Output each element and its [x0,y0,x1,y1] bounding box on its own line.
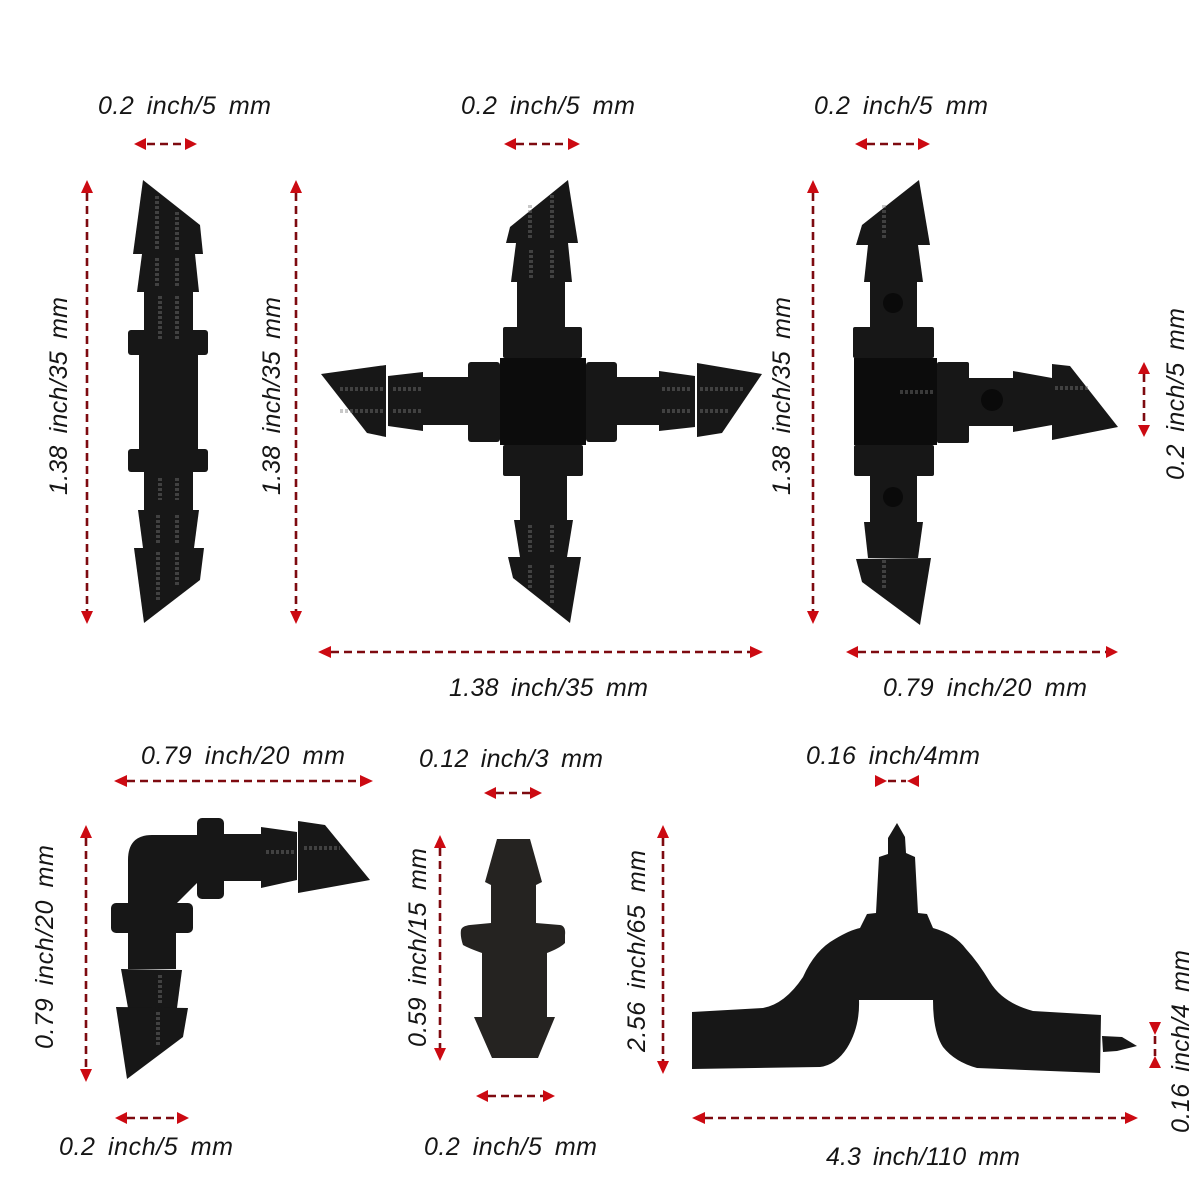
dimension: tee width [846,646,1118,702]
dimension: plug bottom width: 0.2 inch/5 mm [424,1133,597,1161]
dimension: elbow bottom width: 0.2 inch/5 mm [59,1133,233,1161]
dimension: tee height: 1.38 inch/35 mm [768,297,796,495]
dimension: tee side width [1138,308,1190,480]
dimension: straight connector height: 1.38 inch/35 mm [45,297,73,495]
dimension: stake spike width [806,742,980,787]
part: T-shaped stake [692,823,1137,1073]
dimension: tee top width: 0.2 inch/5 mm [814,92,988,120]
dimension: cross width [318,646,763,702]
dimension: stake spike width: 0.16 inch/4mm [806,742,980,770]
dimension: top left width [98,92,271,150]
dimension: elbow height [31,825,92,1082]
part: tee connector [853,180,1118,625]
part: barbed plug [461,839,565,1058]
dimension: tee height [768,180,819,624]
dimension: elbow width [114,742,373,787]
dimension: elbow width: 0.79 inch/20 mm [141,742,345,770]
dimension: cross height: 1.38 inch/35 mm [258,297,286,495]
dimension: elbow height: 0.79 inch/20 mm [31,845,59,1049]
part: straight connector [128,180,208,623]
dimension: stake width [692,1112,1138,1171]
dimension: stake side spike [1149,950,1195,1133]
dimension: elbow bottom width [59,1112,233,1161]
dimension: cross height [258,180,302,624]
dimension: stake width: 4.3 inch/110 mm [826,1143,1020,1171]
dimension: straight connector height [45,180,93,624]
dimension: top left width: 0.2 inch/5 mm [98,92,271,120]
dimension: plug bottom width [424,1090,597,1161]
dimension: cross top width [461,92,635,150]
dimension: stake height: 2.56 inch/65 mm [623,850,651,1053]
dimension: tee top width [814,92,988,150]
dimension: tee width: 0.79 inch/20 mm [883,674,1087,702]
dimension: tee side width: 0.2 inch/5 mm [1162,308,1190,480]
dimension: stake height [623,825,669,1074]
dimension: cross width: 1.38 inch/35 mm [449,674,648,702]
part: elbow connector [111,818,370,1079]
dimension: plug height: 0.59 inch/15 mm [404,848,432,1047]
dimension: cross top width: 0.2 inch/5 mm [461,92,635,120]
dimension: plug top width [419,745,603,799]
part: cross connector [321,180,762,623]
dimension: plug height [404,835,446,1061]
dimension: plug top width: 0.12 inch/3 mm [419,745,603,773]
dimension: stake side spike: 0.16 inch/4 mm [1167,950,1195,1133]
